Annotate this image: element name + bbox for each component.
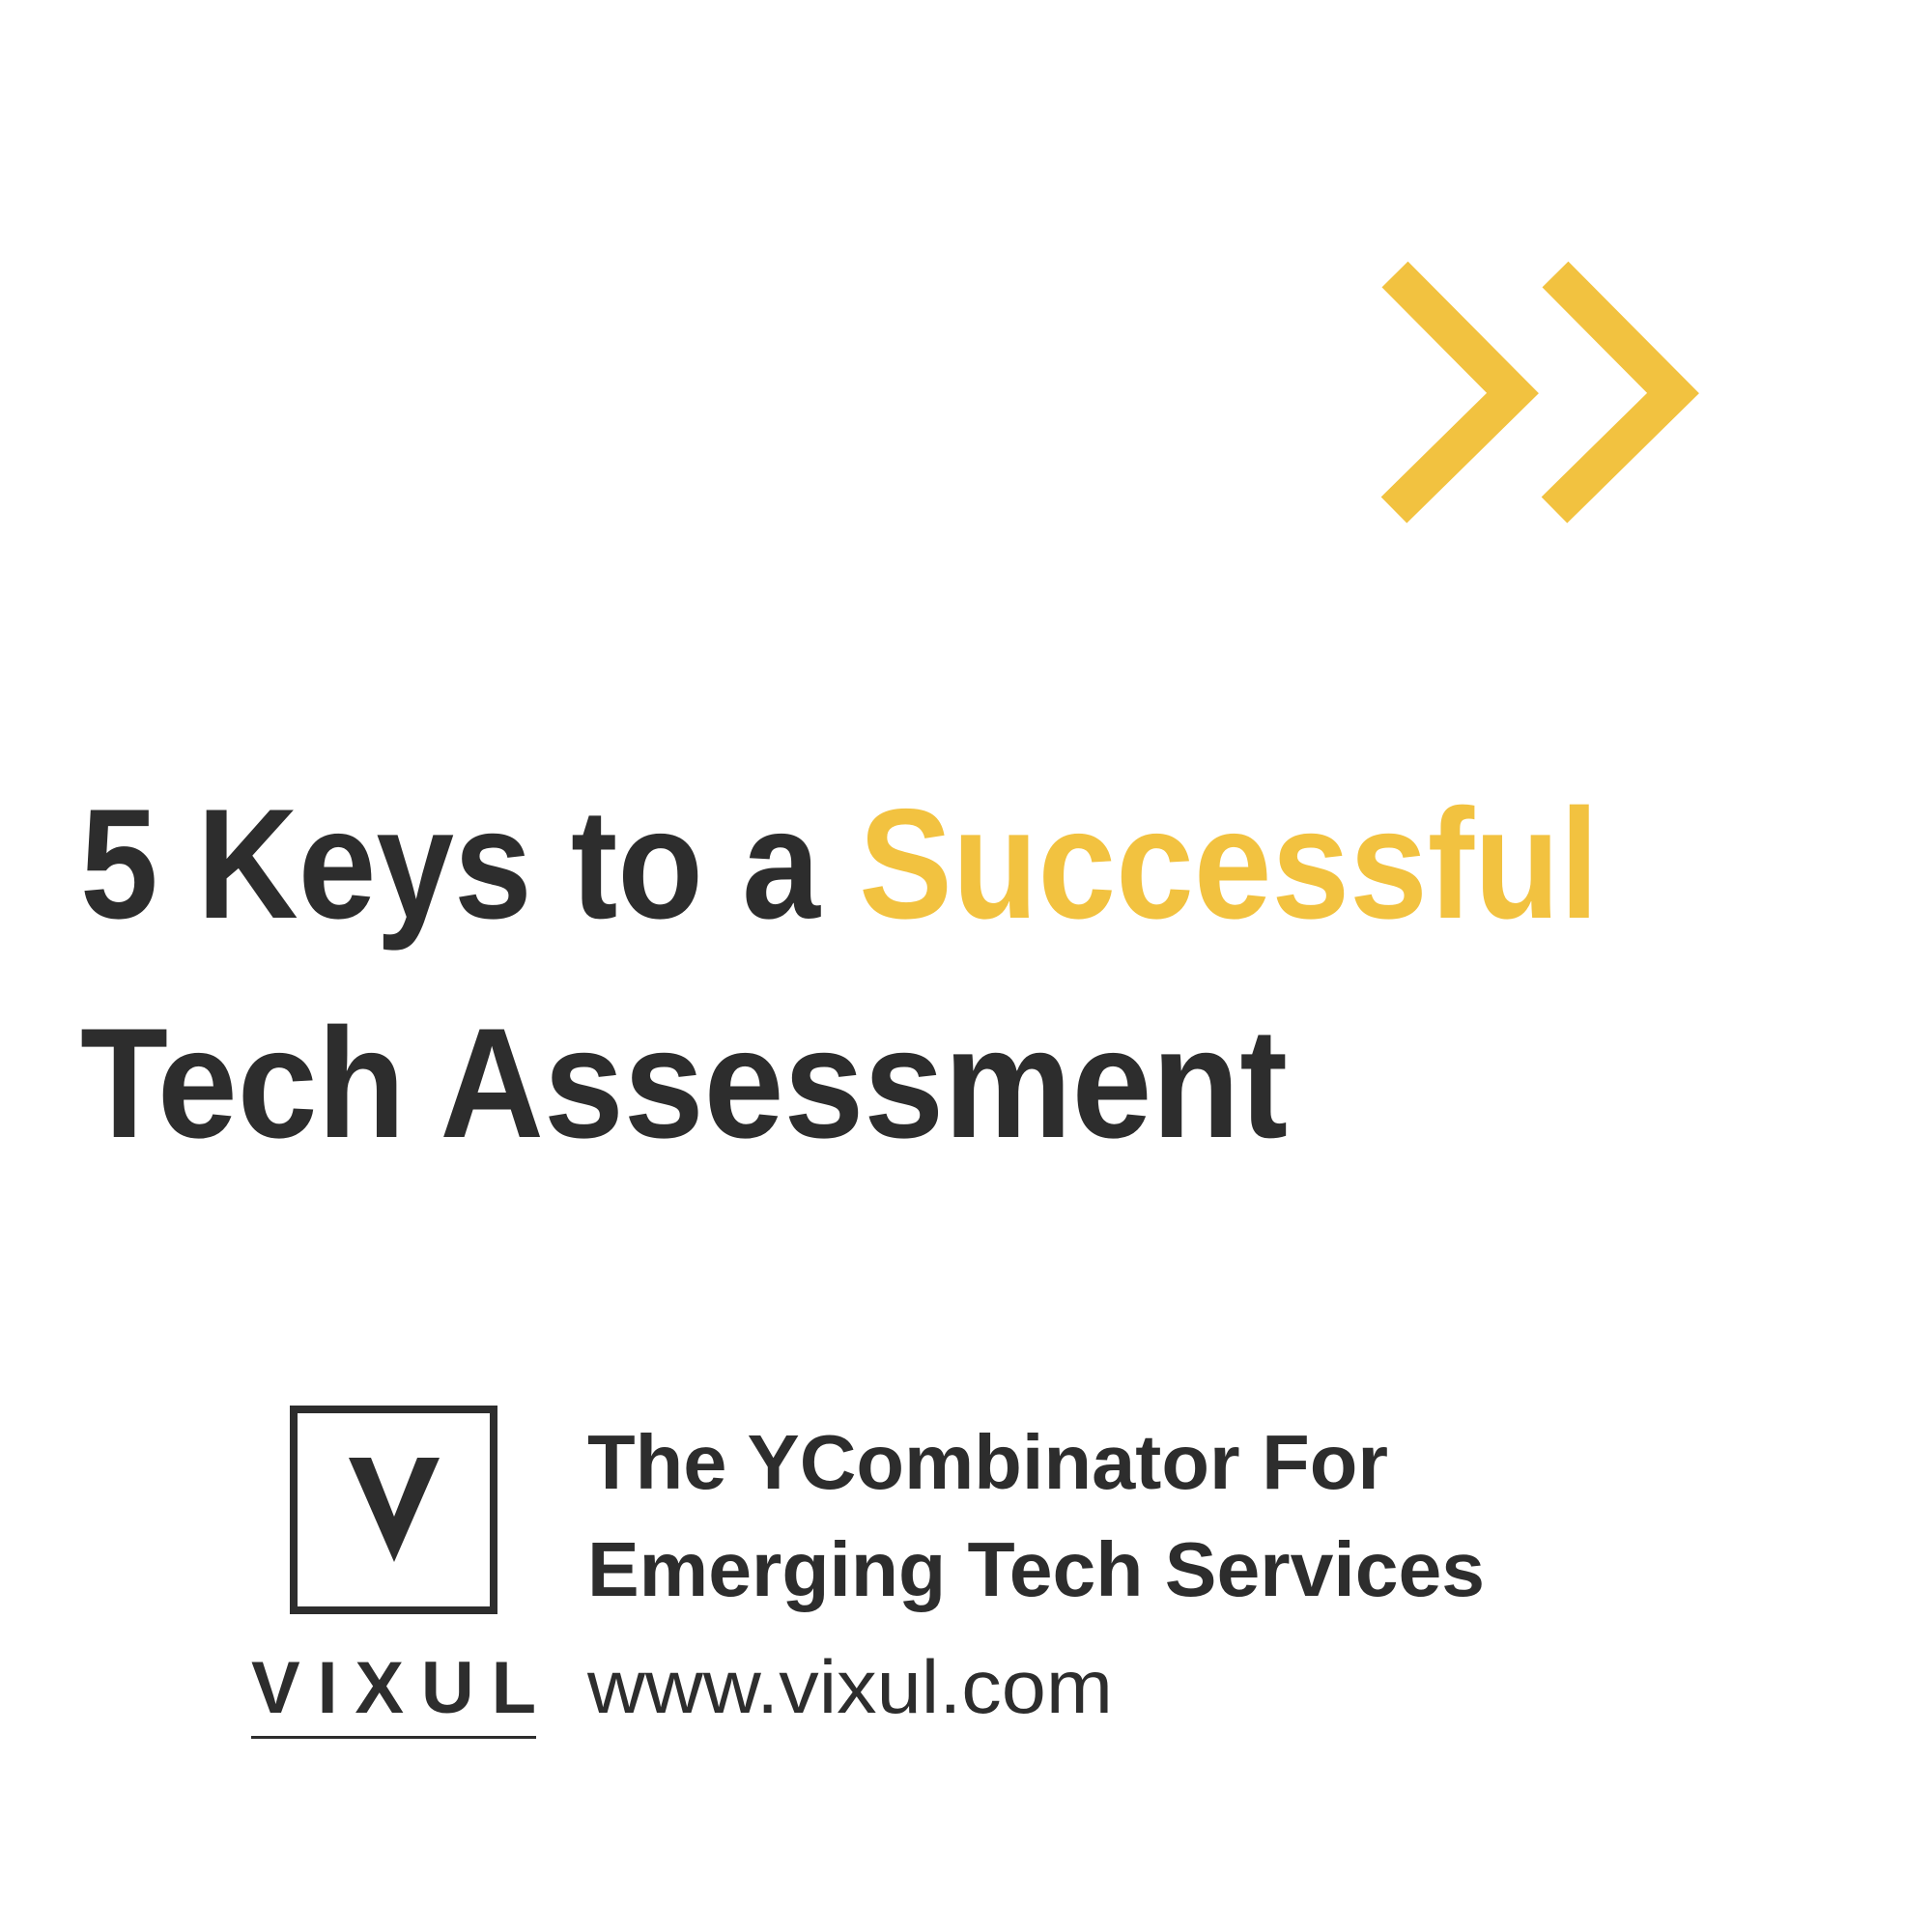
logo: Vixul: VIXUL bbox=[251, 1647, 536, 1729]
title bbox=[80, 777, 1599, 1171]
tagline text bbox=[586, 1419, 1485, 1729]
icon: double chevron arrow bbox=[1394, 274, 1673, 510]
logo: Vixul bbox=[251, 1409, 536, 1739]
tagline text: Emerging Tech Services bbox=[587, 1526, 1485, 1612]
title: Tech Assessment bbox=[80, 996, 1288, 1171]
title: 5 Keys to a Successful bbox=[80, 777, 1599, 952]
tagline text: The YCombinator For bbox=[587, 1419, 1388, 1505]
tagline text: www.vixul.com bbox=[586, 1644, 1113, 1729]
